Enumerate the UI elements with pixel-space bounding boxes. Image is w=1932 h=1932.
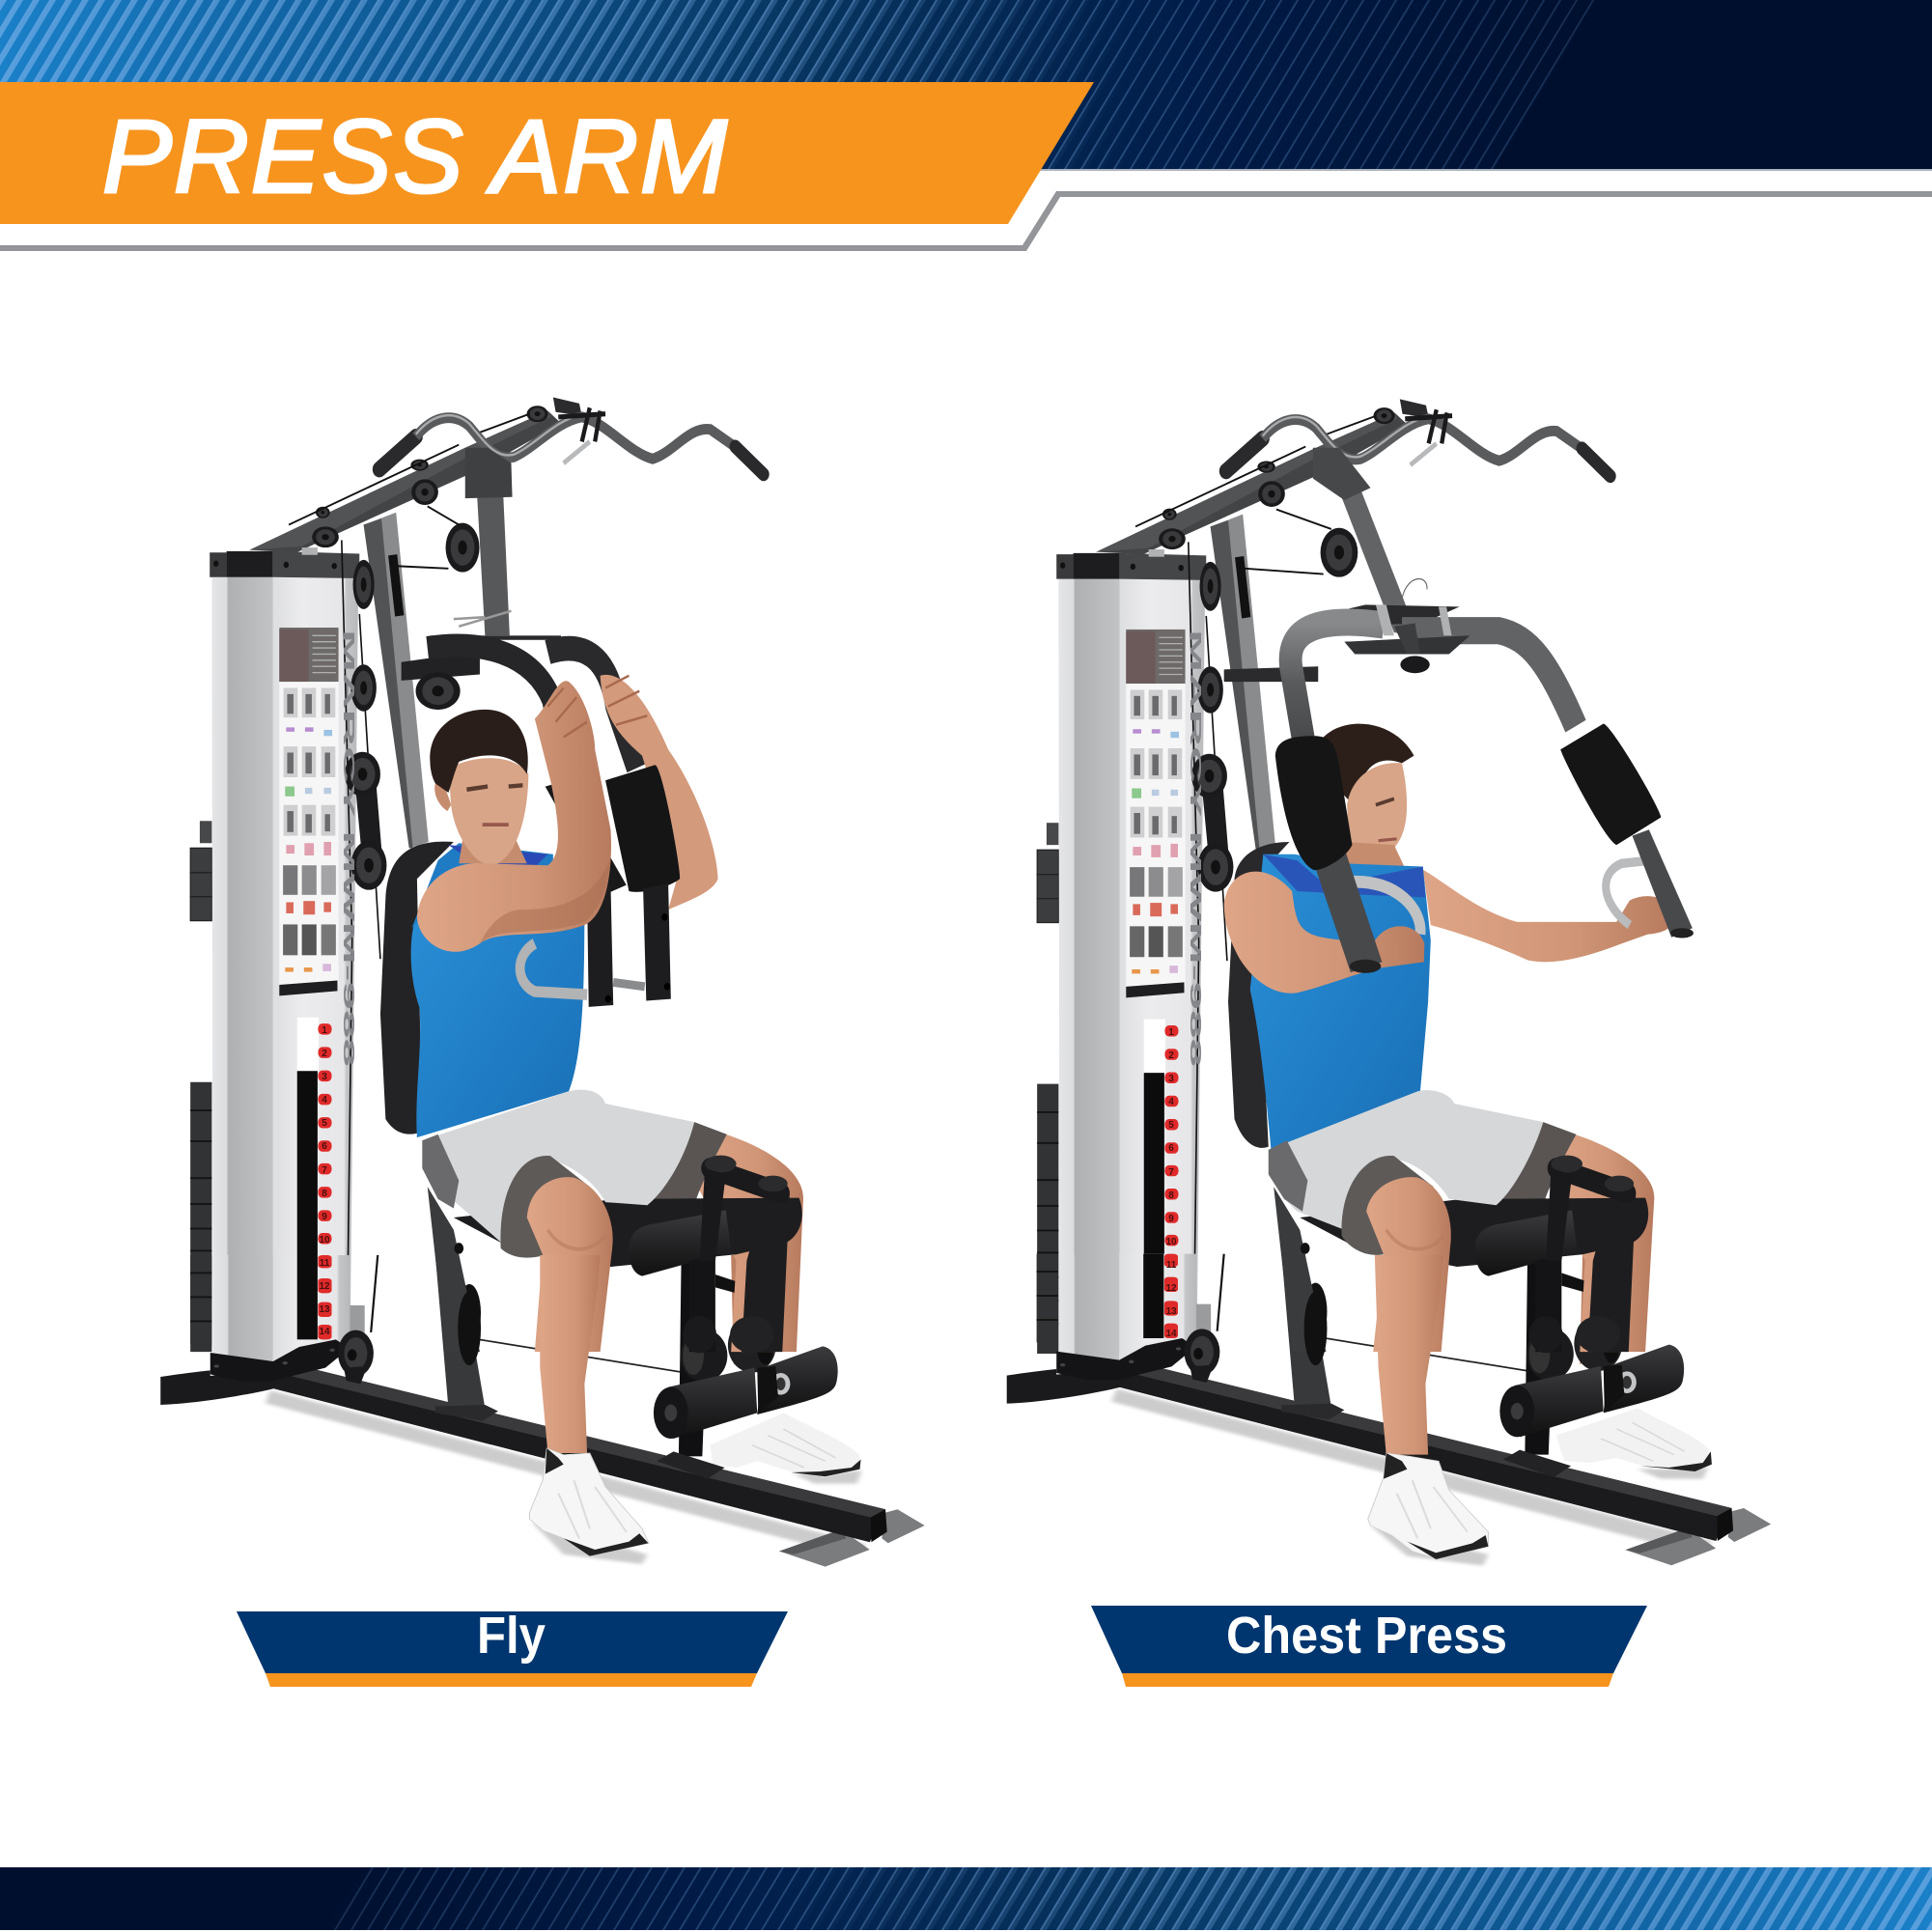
weight numbers: 2 <box>322 1049 327 1059</box>
label: Fly: Fly <box>477 1607 546 1665</box>
far thigh, seat and cuff <box>1274 1122 1654 1365</box>
weight numbers: 14 <box>319 1327 330 1337</box>
weight numbers: 5 <box>1168 1120 1174 1131</box>
tower and weight stack <box>190 397 764 1352</box>
model name: MARCY MWM-988 <box>1187 630 1203 1067</box>
athlete torso and head <box>1224 604 1694 1353</box>
press arm bracket and pole <box>396 448 637 894</box>
bottom footer band <box>0 1867 1932 1930</box>
silver handle <box>520 943 587 994</box>
machine and athlete: Chest Press <box>1007 399 1771 1566</box>
title: PRESS ARM <box>102 98 727 214</box>
lower frame <box>1007 1254 1771 1565</box>
athlete torso and head <box>411 675 790 1353</box>
weight numbers: 3 <box>1168 1074 1174 1084</box>
label: Chest Press <box>1091 1606 1647 1687</box>
weight numbers: 13 <box>319 1304 330 1315</box>
near silver handle <box>1350 882 1420 935</box>
weight numbers: 6 <box>1168 1143 1174 1154</box>
weight numbers: 12 <box>319 1281 330 1292</box>
head <box>1324 724 1414 808</box>
weight numbers: 5 <box>322 1118 327 1129</box>
model name: MARCY MWM-988 <box>340 630 356 1067</box>
near shin and shoe <box>1368 1255 1488 1559</box>
near thigh <box>1366 1177 1451 1352</box>
seat back <box>1228 842 1289 1148</box>
weight numbers: 8 <box>322 1189 327 1199</box>
pole and pulley <box>1224 448 1427 682</box>
press arm pad and tubes <box>605 765 680 892</box>
top header band <box>0 0 1932 171</box>
weight numbers: 12 <box>1165 1283 1177 1294</box>
weight numbers: 11 <box>1166 1260 1177 1271</box>
machine and athlete: Fly <box>160 397 925 1567</box>
floor shadows <box>1111 1388 1714 1566</box>
near shin and shoe <box>529 1255 649 1556</box>
weight numbers: 7 <box>322 1165 327 1176</box>
far arm <box>1423 870 1675 962</box>
label: Fly <box>237 1607 788 1687</box>
header gray rule <box>0 191 1932 251</box>
weight numbers: 10 <box>1165 1237 1177 1247</box>
weight numbers: 1 <box>1168 1027 1174 1038</box>
tower and weight stack <box>1037 399 1610 1354</box>
weight numbers: 2 <box>1168 1050 1174 1061</box>
weight numbers: 10 <box>319 1235 330 1246</box>
weight numbers: 7 <box>1168 1167 1174 1178</box>
lower frame <box>160 1255 925 1567</box>
far press tube, pad and handle <box>1606 860 1650 925</box>
weight numbers: 1 <box>322 1025 327 1036</box>
far arm <box>601 675 718 910</box>
near thigh <box>527 1177 613 1352</box>
shirt <box>411 891 584 1137</box>
weight numbers: 8 <box>1168 1190 1174 1201</box>
near arm <box>417 681 611 952</box>
floor shadows <box>266 1390 867 1564</box>
weight numbers: 14 <box>1165 1329 1177 1339</box>
weight numbers: 9 <box>1168 1214 1174 1224</box>
near arm <box>1224 872 1424 994</box>
athlete lower body: far leg <box>654 1255 861 1479</box>
weight numbers: 11 <box>320 1258 330 1269</box>
head <box>459 829 527 863</box>
shorts <box>422 1090 694 1243</box>
title banner <box>0 82 1094 224</box>
weight numbers: 6 <box>322 1141 327 1152</box>
seat back <box>380 842 454 1134</box>
weight numbers: 3 <box>322 1072 327 1082</box>
athlete lower body: far leg <box>1499 1253 1712 1477</box>
press arm tubes <box>1339 604 1460 625</box>
weight numbers: 13 <box>1165 1306 1177 1317</box>
near press tube and pad <box>1313 848 1382 972</box>
weight numbers: 9 <box>322 1212 327 1222</box>
shorts <box>1269 1090 1543 1230</box>
shirt <box>1250 854 1431 1150</box>
weight numbers <box>1165 1027 1177 1339</box>
far thigh, seat and cuff <box>428 1122 803 1365</box>
label: Chest Press: Chest Press <box>1226 1607 1507 1665</box>
weight numbers: 4 <box>322 1095 327 1106</box>
weight numbers <box>319 1025 330 1337</box>
weight numbers: 4 <box>1168 1097 1174 1107</box>
